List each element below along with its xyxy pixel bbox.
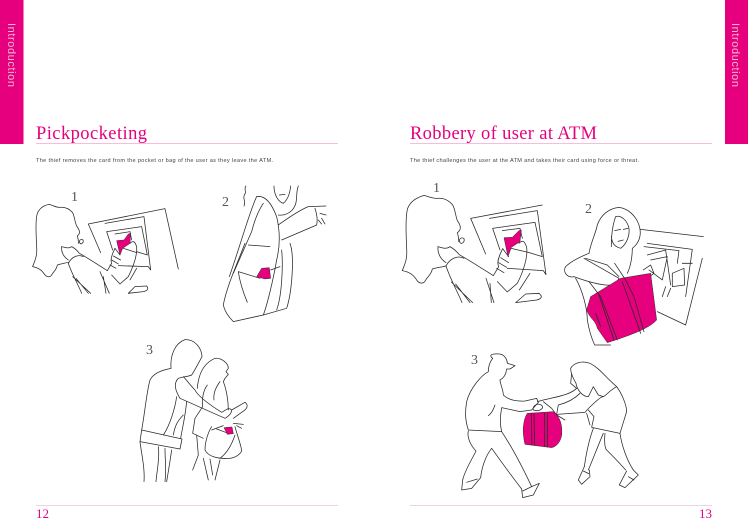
page number 13: 13 — [699, 506, 712, 521]
text: robbery description: The thief challenges the user at the ATM and takes their card using force or threat. — [410, 158, 639, 164]
step number 1 left: 1 — [71, 190, 78, 205]
step number 2 right: 2 — [585, 202, 592, 217]
step number 3 left: 3 — [146, 343, 153, 358]
step number 2 left: 2 — [222, 195, 229, 210]
illustration: user inserting card at ATM, left — [33, 204, 178, 293]
step number 3 right: 3 — [471, 353, 478, 368]
footer line left — [36, 504, 338, 506]
footer line right — [410, 504, 712, 506]
illustration: pickpocket reaching into shoulder bag pocket, left — [223, 186, 326, 322]
illustration: woman clutching pink bag at ATM, right — [565, 207, 703, 345]
page number 12: 12 — [36, 506, 49, 521]
heading: Robbery of user at ATM: Robbery of user at ATM — [410, 124, 597, 144]
step number 1 right: 1 — [433, 181, 440, 196]
illustration: user inserting card at ATM, right — [402, 195, 546, 303]
illustration: thief in hood reaching into bag, left — [140, 340, 247, 482]
text: pickpocketing description: The thief removes the card from the pocket or bag of the user as they leave the ATM. — [36, 158, 273, 164]
illustration: thief snatching pink bag from woman, right — [462, 354, 638, 498]
left section tab: Introduction — [5, 23, 17, 87]
right section tab — [725, 0, 748, 144]
left section tab — [0, 0, 24, 144]
right section tab: Introduction — [729, 23, 741, 87]
heading: Pickpocketing: Pickpocketing — [36, 124, 147, 144]
